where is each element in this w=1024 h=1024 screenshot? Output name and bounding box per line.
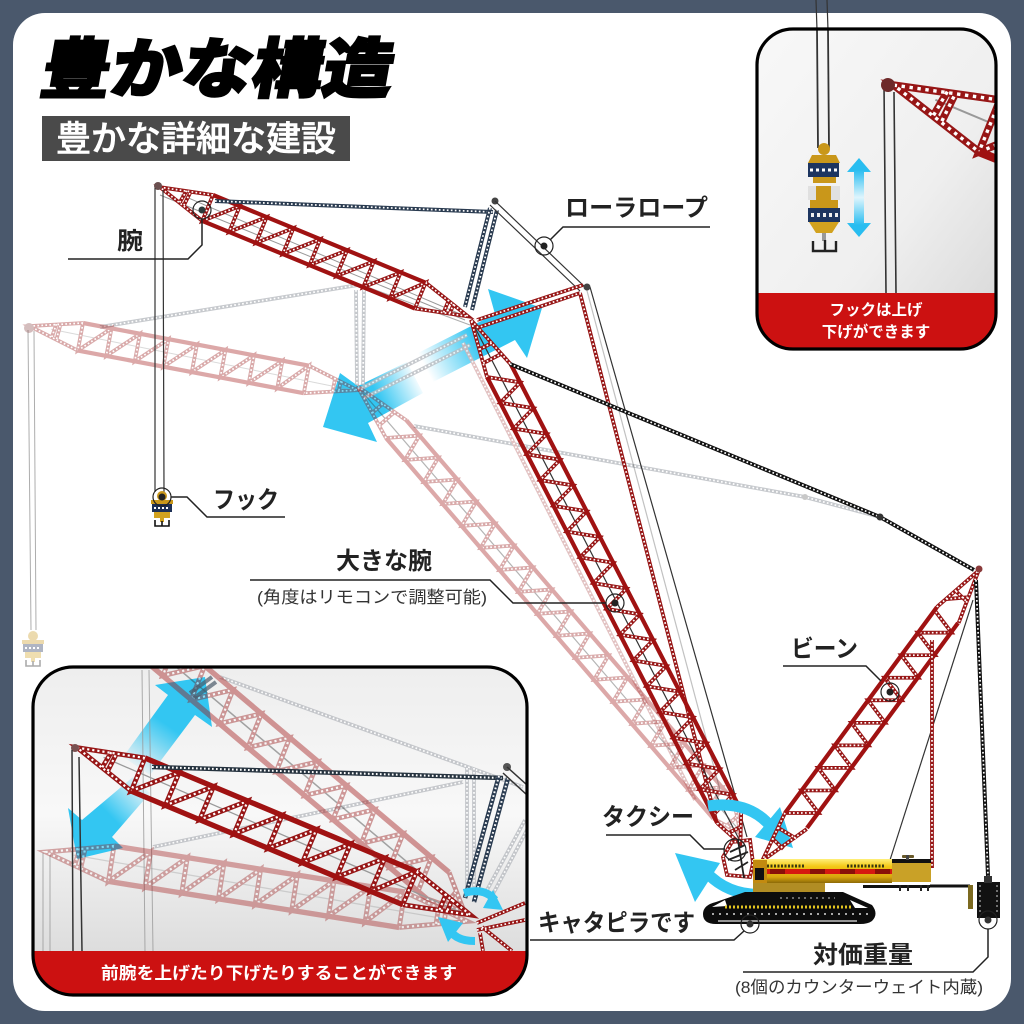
ghost main boom [348, 376, 753, 841]
label: crawler [530, 910, 759, 940]
inset caption bar: 下げができます [822, 322, 930, 341]
inset panel: forearm raising and lowering [31, 665, 529, 997]
ghost forearm boom [24, 313, 360, 403]
hook small [151, 491, 173, 526]
hoist ropes entering hook inset [816, 0, 828, 30]
movement arrows at turret [675, 805, 793, 902]
inset stay and hoist lines [71, 744, 527, 951]
label: counterweight [735, 911, 997, 997]
label: counterweight: 対価重量 [813, 942, 913, 969]
inset pivot arrows [438, 890, 503, 942]
counter boom stays [890, 580, 988, 876]
mast strut [465, 198, 498, 310]
inset strut members [477, 903, 525, 951]
ghost crane: lowered position [28, 285, 880, 800]
counterweight [930, 876, 1000, 918]
label: roller rope: ローラロープ [565, 195, 708, 222]
label: forearm: 腕 [117, 228, 143, 255]
inset ghost raised boom [150, 668, 465, 911]
inset ghost lines [43, 670, 527, 951]
label: counterweight: (8個のカウンターウェイト内蔵) [735, 978, 983, 997]
inset panel: hook raising and lowering [755, 27, 998, 351]
label: cab: タクシー [602, 804, 694, 831]
roller rope lines [490, 201, 747, 837]
inset hook block [808, 29, 840, 251]
label: crawler: キャタピラです [538, 910, 695, 937]
crawler track [703, 892, 876, 924]
ghost hook [22, 631, 44, 666]
label: hook [153, 487, 285, 517]
inset caption bar [33, 951, 527, 995]
inset caption bar [757, 293, 996, 349]
label: counter boom [783, 636, 899, 701]
inset solid boom [68, 744, 479, 919]
short strut [477, 284, 716, 820]
main forearm boom [154, 175, 474, 328]
label: main boom [250, 548, 624, 612]
label: roller rope [535, 195, 710, 255]
subtitle banner: 豊かな詳細な建設 [56, 120, 336, 159]
counter boom [754, 563, 991, 871]
label: forearm [68, 201, 211, 259]
turret frame [723, 840, 753, 878]
inset arrow: forearm arc [68, 677, 212, 859]
label: main boom: 大きな腕 [336, 548, 432, 575]
inset ghost mast fragment [190, 677, 216, 698]
inset forearm boom [880, 79, 994, 163]
main boom [460, 313, 755, 849]
label: main boom: (角度はリモコンで調整可能) [257, 588, 487, 607]
inset vertical double arrow [847, 158, 871, 237]
label: counter boom: ビーン [791, 636, 858, 663]
main back stay [510, 364, 974, 570]
movement arrow: boom pivot double arrow [323, 289, 542, 442]
inset hoist lines [881, 78, 896, 293]
label: hook: フック [213, 487, 279, 514]
forearm back stay [215, 201, 493, 212]
inset caption bar: フックは上げ [829, 301, 923, 319]
title: 豊かな構造 [36, 33, 400, 106]
inset caption bar: 前腕を上げたり下げたりすることができます [101, 963, 457, 983]
yellow machine body [753, 855, 931, 892]
label: cab [602, 804, 746, 861]
inset ghost lowered boom [36, 843, 476, 930]
hoist ropes [155, 188, 164, 492]
